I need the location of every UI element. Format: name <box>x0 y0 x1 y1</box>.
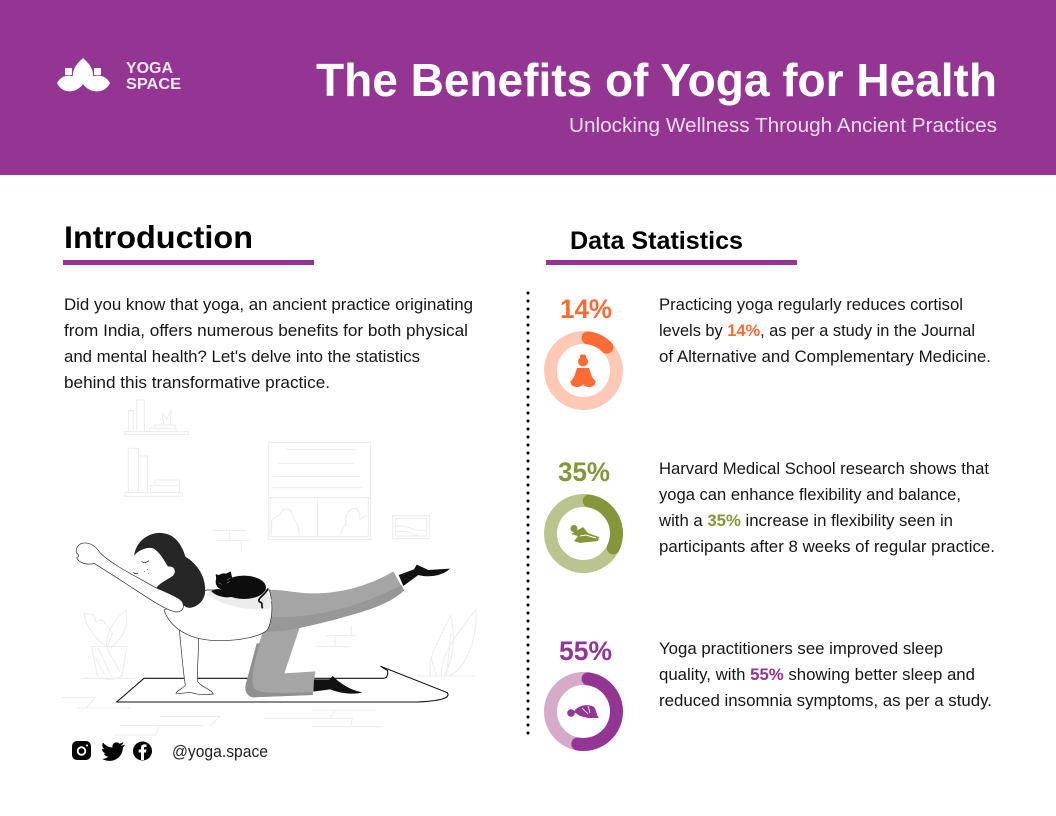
hair <box>134 533 205 608</box>
text block: introduction: from India, offers numerous benefits for both physical <box>64 322 468 340</box>
text: 14% description: of Alternative and Complementary Medicine. <box>659 348 991 366</box>
text: 35% description: participants after 8 weeks of regular practice. <box>659 538 995 556</box>
heading: introduction <box>63 219 314 265</box>
icon: twitter <box>102 742 125 761</box>
percentage 55%: 55% <box>559 636 612 666</box>
kneeling leg <box>245 617 315 697</box>
text: 55% description: quality, with 55% showing better sleep and <box>659 666 975 684</box>
header banner <box>0 0 1056 175</box>
raised leg <box>260 571 404 632</box>
subtitle: Unlocking Wellness Through Ancient Practices <box>569 114 997 137</box>
yoga mat <box>117 666 448 702</box>
social handle: @yoga.space <box>172 743 268 761</box>
text: 14% description <box>659 296 991 366</box>
stat: 14% cortisol <box>546 294 991 408</box>
stat: 55% sleep <box>546 636 992 749</box>
supporting arm <box>176 630 213 695</box>
text: 55% description: Yoga practitioners see improved sleep <box>659 640 943 658</box>
text: 55% description <box>659 640 992 710</box>
logo text: YOGA <box>126 60 173 77</box>
text block: introduction: and mental health? Let's delve into the statistics <box>64 348 420 366</box>
heading: introduction: Introduction <box>64 219 253 255</box>
text: 35% description: yoga can enhance flexibility and balance, <box>659 486 961 504</box>
donut chart 14% <box>546 333 621 408</box>
dotted divider <box>526 293 530 735</box>
percentage 35%: 35% <box>558 457 610 487</box>
face <box>132 548 175 587</box>
icon: reclining pose <box>570 525 599 543</box>
text: 55% description: reduced insomnia symptoms, as per a study. <box>659 692 992 710</box>
outstretched arm <box>76 543 183 612</box>
logo text <box>126 60 181 93</box>
text: 35% description <box>658 460 995 556</box>
donut chart 55% <box>546 674 621 749</box>
text block: introduction: Did you know that yoga, an ancient practice originating <box>64 296 473 314</box>
heading: data statistics <box>546 227 797 265</box>
cat <box>211 571 268 608</box>
title: The Benefits of Yoga for Health <box>316 54 997 106</box>
icon: meditation <box>570 354 596 387</box>
logo text: SPACE <box>126 76 181 93</box>
icon: lotus <box>57 58 110 91</box>
text block: introduction: behind this transformative practice. <box>64 374 330 392</box>
text: 14% description: levels by 14%, as per a study in the Journal <box>659 322 975 340</box>
background room line art <box>62 400 477 735</box>
text: 35% description: Harvard Medical School research shows that <box>659 460 989 478</box>
illustration: woman doing yoga with cat <box>62 400 477 735</box>
donut chart 35% <box>545 495 622 572</box>
text: 35% description: with a 35% increase in flexibility seen in <box>658 512 953 530</box>
icon: instagram <box>72 741 91 760</box>
text block: introduction <box>64 296 473 392</box>
percentage 14%: 14% <box>560 294 612 324</box>
social media row <box>72 741 268 761</box>
logo: yoga space <box>57 58 181 93</box>
icon: child's pose <box>567 705 599 718</box>
socks <box>313 565 450 694</box>
text: 14% description: Practicing yoga regularly reduces cortisol <box>659 296 963 314</box>
heading: data statistics: Data Statistics <box>570 227 743 255</box>
torso <box>164 590 272 641</box>
stat: 35% flexibility <box>545 457 995 572</box>
icon: facebook <box>133 742 152 760</box>
